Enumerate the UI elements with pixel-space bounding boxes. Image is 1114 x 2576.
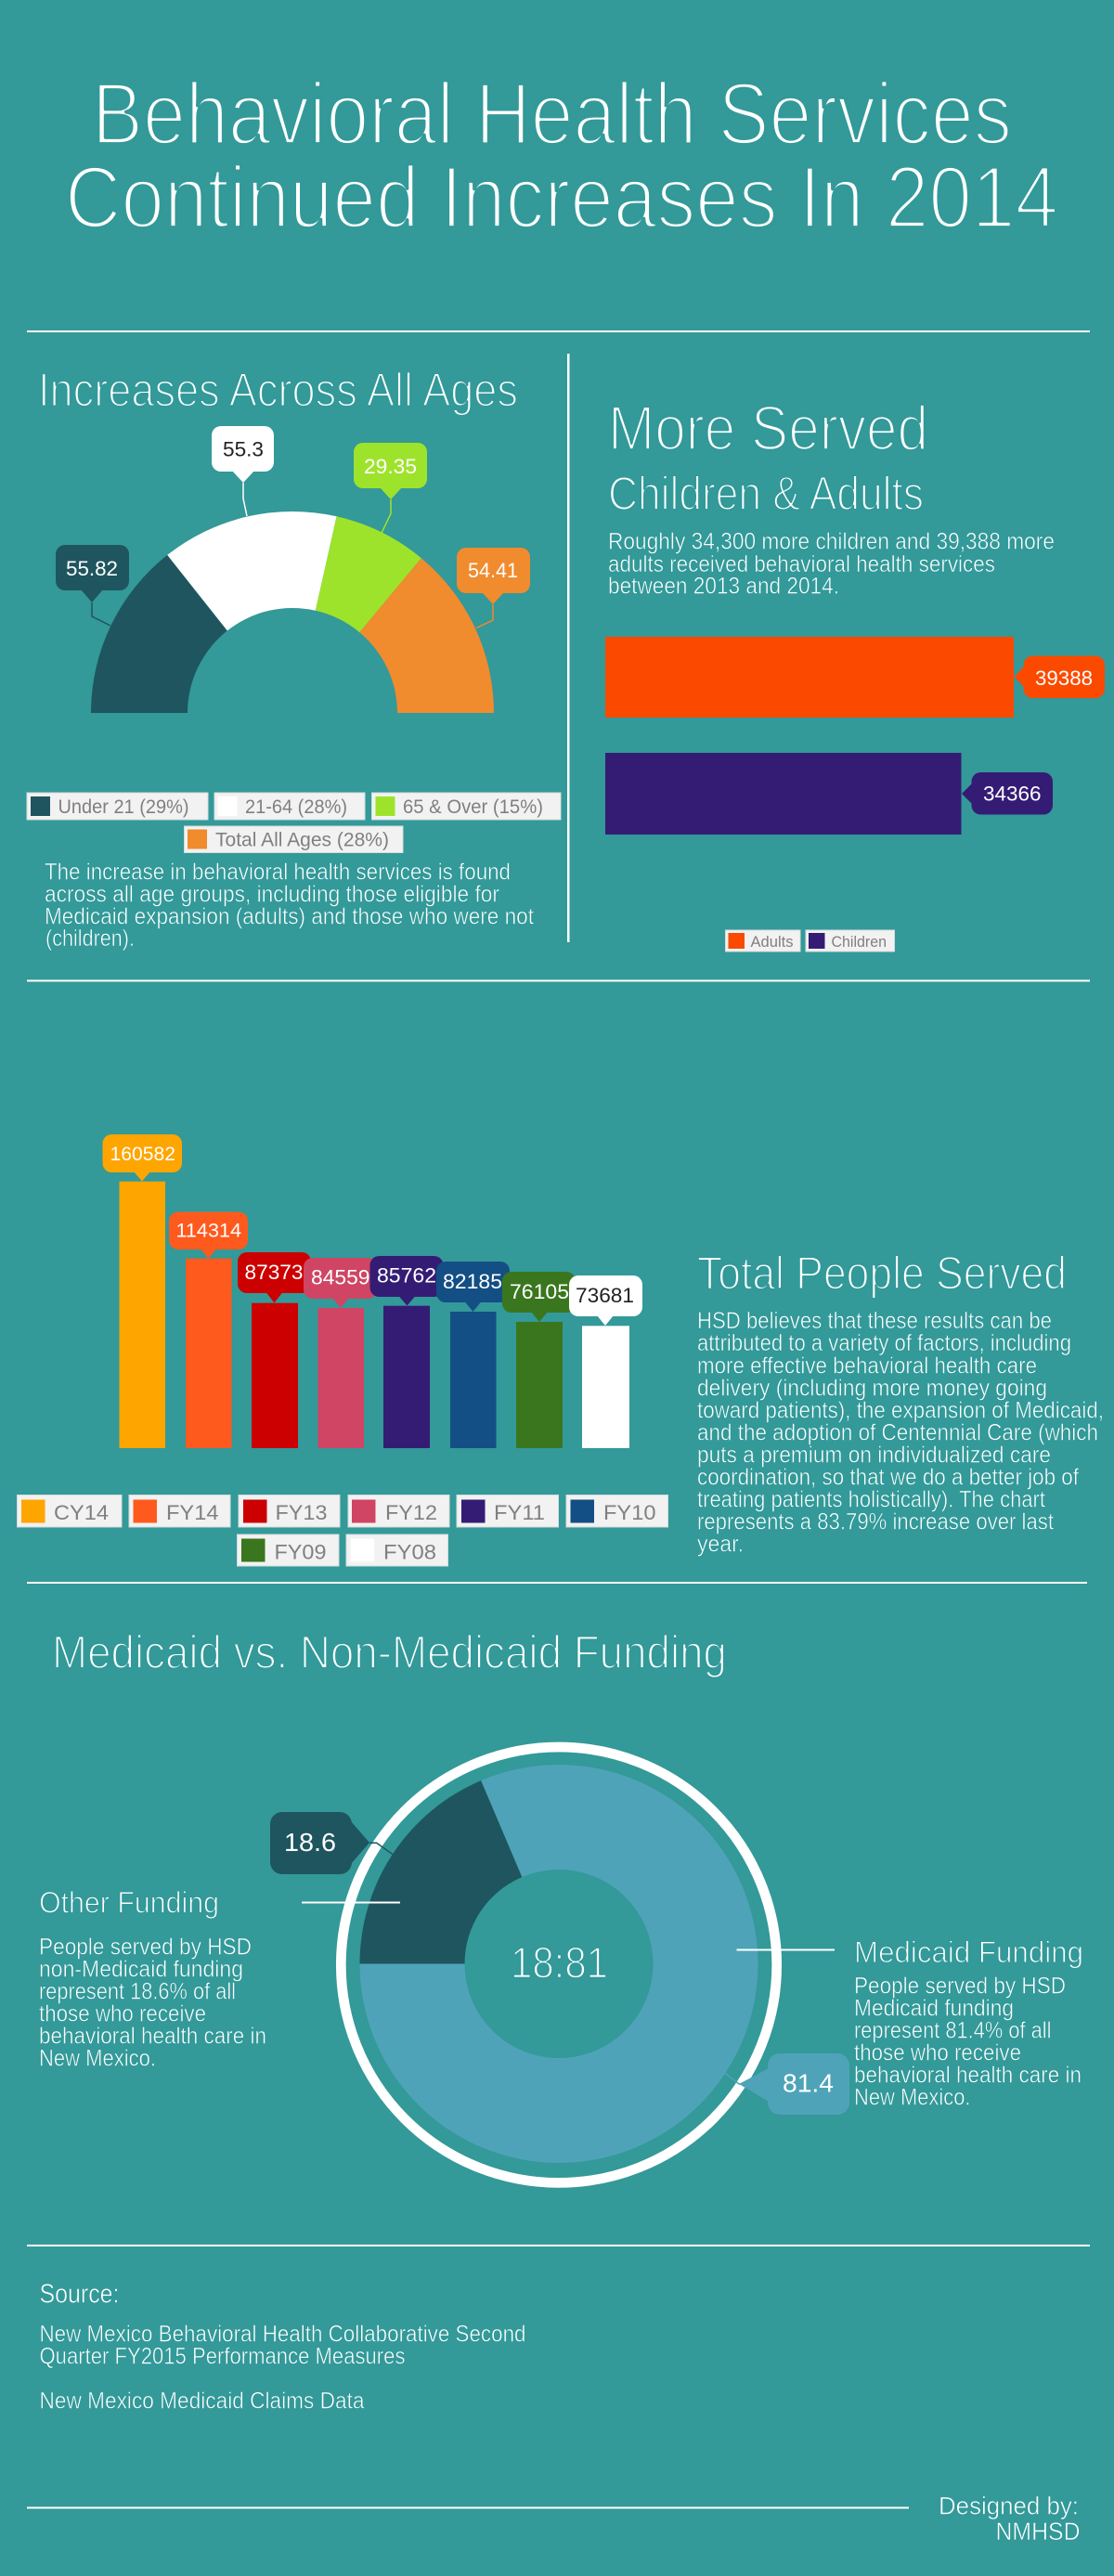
- legend: age groups: 21-64 (28%): [245, 796, 347, 818]
- heading: source: Source:: [39, 2280, 119, 2310]
- subheading: children and adults: Children & Adults: [608, 467, 924, 520]
- callout: medicaid funding value: [725, 2053, 849, 2115]
- callout: adults value: 39388: [1035, 667, 1093, 690]
- text: total people served description: attributed to a variety of factors, including: [697, 1330, 1071, 1356]
- callout: total all ages value: [457, 548, 530, 628]
- text: total people served description: year.: [697, 1532, 744, 1558]
- callout: FY10 value: 82185: [443, 1270, 502, 1293]
- label: medicaid funding: those who receive: [854, 2040, 1021, 2066]
- text: age groups description: The increase in behavioral health services is found: [45, 860, 511, 886]
- panel: increases across all ages: [27, 364, 561, 951]
- legend: adults and children: [726, 930, 895, 951]
- callout: under 21 value: 55.82: [66, 557, 118, 580]
- leader line: other funding: [302, 1901, 400, 1903]
- label: other funding: behavioral health care in: [39, 2024, 266, 2050]
- text: source list: New Mexico Medicaid Claims Data: [39, 2388, 365, 2414]
- label: medicaid funding: represent 81.4% of all: [854, 2018, 1051, 2044]
- callout: 65 and over value: [354, 443, 427, 533]
- credit: designed by: [939, 2492, 1081, 2545]
- text: total people served description: [697, 1308, 1104, 1558]
- label: medicaid funding: New Mexico.: [854, 2085, 971, 2111]
- legend: years: FY10: [603, 1501, 655, 1524]
- text: total people served description: delivery (including more money going: [697, 1376, 1047, 1402]
- label: other funding: non-Medicaid funding: [39, 1957, 243, 1983]
- text: total people served description: puts a premium on individualized care: [697, 1443, 1051, 1469]
- heading: increases across all ages: Increases Across All Ages: [38, 364, 518, 416]
- credit: designed by: Designed by:: [939, 2492, 1079, 2519]
- text: source list: [39, 2321, 525, 2414]
- text: source list: Quarter FY2015 Performance Measures: [39, 2343, 405, 2369]
- text: age groups description: Medicaid expansion (adults) and those who were not: [45, 904, 534, 930]
- text: more served description: between 2013 and 2014.: [608, 574, 839, 600]
- callout: FY14 value: [169, 1212, 248, 1259]
- donut chart: funding split: [341, 1747, 777, 2182]
- callout: FY10 value: [436, 1262, 510, 1312]
- text: age groups description: [45, 860, 534, 951]
- legend: years: CY14: [54, 1501, 109, 1524]
- label: other funding: represent 18.6% of all: [39, 1979, 236, 2005]
- label: other funding: [39, 1886, 266, 2072]
- callout: medicaid funding value: 81.4: [783, 2069, 834, 2098]
- heading: medicaid vs non-medicaid funding: Medicaid vs. Non-Medicaid Funding: [52, 1626, 727, 1678]
- callout: under 21 value: [56, 545, 129, 626]
- legend: years: FY09: [275, 1540, 327, 1563]
- text: source list: New Mexico Behavioral Health Collaborative Second: [39, 2321, 525, 2347]
- legend: adults and children: Adults: [750, 933, 793, 951]
- callout: FY13 value: [238, 1252, 311, 1303]
- label: other funding: People served by HSD: [39, 1935, 252, 1961]
- callout: 21-64 value: [212, 426, 274, 516]
- callout: FY11 value: [369, 1256, 444, 1305]
- callout: FY09 value: [502, 1272, 576, 1322]
- label: medicaid funding: [854, 1935, 1083, 2111]
- legend: adults and children: Children: [832, 933, 887, 951]
- callout: FY09 value: 76105: [510, 1280, 569, 1303]
- legend: age groups: Under 21 (29%): [58, 796, 189, 818]
- callout: adults value: [1014, 655, 1105, 698]
- label: medicaid funding: Medicaid Funding: [854, 1935, 1083, 1969]
- text: total people served description: more effective behavioral health care: [697, 1353, 1037, 1379]
- callout: FY08 value: [569, 1275, 642, 1326]
- callout: other funding value: 18.6: [284, 1828, 336, 1857]
- heading: more served: More Served: [608, 394, 928, 464]
- callout: CY14 value: [102, 1134, 182, 1181]
- legend: years: FY08: [383, 1540, 436, 1563]
- callout: FY11 value: 85762: [377, 1264, 436, 1288]
- callout: children value: 34366: [983, 782, 1042, 806]
- text: age groups description: (children).: [45, 926, 135, 951]
- callout: 65 and over value: 29.35: [364, 455, 417, 478]
- legend: age groups: Total All Ages (28%): [215, 830, 389, 850]
- callout: FY14 value: 114314: [176, 1221, 241, 1242]
- legend: years: FY13: [275, 1501, 327, 1524]
- callout: 21-64 value: 55.3: [223, 438, 264, 460]
- callout: CY14 value: 160582: [110, 1144, 175, 1165]
- callout: other funding value: [270, 1812, 395, 1874]
- legend: years: FY11: [494, 1501, 545, 1524]
- callout: FY13 value: 87373: [245, 1261, 303, 1284]
- label: other funding: those who receive: [39, 2001, 206, 2027]
- panel: more served: [605, 394, 1105, 951]
- title: [65, 65, 1058, 247]
- credit: designed by: NMHSD: [995, 2518, 1081, 2545]
- callout: total all ages value: 54.41: [468, 559, 518, 582]
- center label: ratio: 18:81: [511, 1938, 608, 1987]
- bar: children: [605, 753, 962, 835]
- panel: total people served: [17, 1134, 1104, 1566]
- legend: age groups: 65 & Over (15%): [403, 796, 543, 818]
- callout: children value: [962, 772, 1053, 815]
- text: more served description: [608, 529, 1055, 600]
- legend: years: FY12: [385, 1501, 437, 1524]
- legend: years: [17, 1495, 668, 1566]
- label: medicaid funding: behavioral health care in: [854, 2063, 1082, 2089]
- heading: total people served: Total People Served: [697, 1248, 1067, 1300]
- half donut chart: [91, 511, 494, 713]
- panel: medicaid vs non-medicaid funding: [39, 1626, 1083, 2182]
- text: more served description: adults received behavioral health services: [608, 551, 995, 577]
- text: age groups description: across all age groups, including those eligible for: [45, 882, 499, 908]
- bar: adults: [605, 637, 1014, 718]
- legend: age groups: [27, 793, 561, 852]
- callout: FY12 value: 84559: [311, 1266, 369, 1289]
- leader line: medicaid funding: [737, 1949, 835, 1951]
- text: more served description: Roughly 34,300 more children and 39,388 more: [608, 529, 1055, 555]
- text: total people served description: treating patients holistically). The chart: [697, 1487, 1045, 1513]
- label: medicaid funding: Medicaid funding: [854, 1996, 1014, 2022]
- label: other funding: Other Funding: [39, 1886, 219, 1920]
- callout: FY12 value: [304, 1258, 377, 1308]
- callout: FY08 value: 73681: [576, 1284, 634, 1307]
- bar chart: people served by year: [119, 1182, 629, 1448]
- text: total people served description: coordination, so that we do a better job of: [697, 1465, 1079, 1491]
- panel: sources: [39, 2280, 525, 2414]
- text: total people served description: represents a 83.79% increase over last: [697, 1509, 1054, 1535]
- label: medicaid funding: People served by HSD: [854, 1974, 1066, 2000]
- label: other funding: New Mexico.: [39, 2046, 156, 2072]
- legend: years: FY14: [166, 1501, 219, 1524]
- text: total people served description: HSD believes that these results can be: [697, 1308, 1052, 1334]
